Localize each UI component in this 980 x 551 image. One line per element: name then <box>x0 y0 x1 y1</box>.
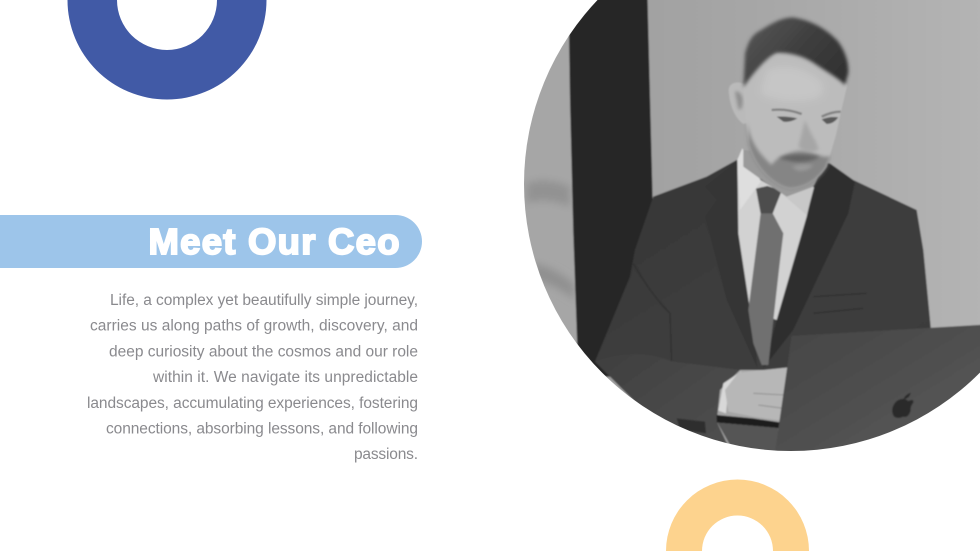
head <box>729 17 848 197</box>
suit jacket <box>595 160 931 370</box>
body text: Life, a complex yet beautifully simple journey, <box>110 292 418 309</box>
laptop <box>774 324 980 457</box>
body text: carries us along paths of growth, discovery, and <box>90 318 418 335</box>
surface below hand <box>717 422 779 450</box>
dark band under hand <box>717 415 782 428</box>
face <box>743 52 847 189</box>
apple logo <box>892 393 913 418</box>
heading: Meet Our Ceo <box>148 221 400 262</box>
blue donut shape <box>68 0 266 100</box>
circular portrait of CEO with laptop <box>517 0 980 457</box>
hair <box>743 17 848 87</box>
yellow donut shape <box>666 480 809 551</box>
body text <box>87 292 418 463</box>
body text: within it. We navigate its unpredictable <box>152 369 418 386</box>
jacket cuff buttons <box>677 418 706 433</box>
body text: connections, absorbing lessons, and following <box>106 420 418 438</box>
hand with shirt cuff <box>718 367 788 421</box>
wall background <box>570 0 980 444</box>
body text: deep curiosity about the cosmos and our role <box>109 343 418 360</box>
dark column <box>568 0 653 377</box>
ear <box>728 82 746 124</box>
necktie <box>748 212 784 366</box>
jacket sleeve <box>596 361 740 444</box>
banner pill <box>0 215 422 268</box>
title banner <box>0 215 422 268</box>
nose shadow <box>798 123 818 151</box>
curtain strip <box>524 78 563 304</box>
shirt <box>736 164 810 321</box>
jacket lapels <box>705 162 757 368</box>
mouth <box>778 155 820 162</box>
beard stubble <box>747 122 831 189</box>
neck <box>743 150 827 197</box>
body text: passions. <box>354 446 418 463</box>
body text: landscapes, accumulating experiences, fostering <box>87 395 418 412</box>
brows and eyes <box>772 110 802 114</box>
